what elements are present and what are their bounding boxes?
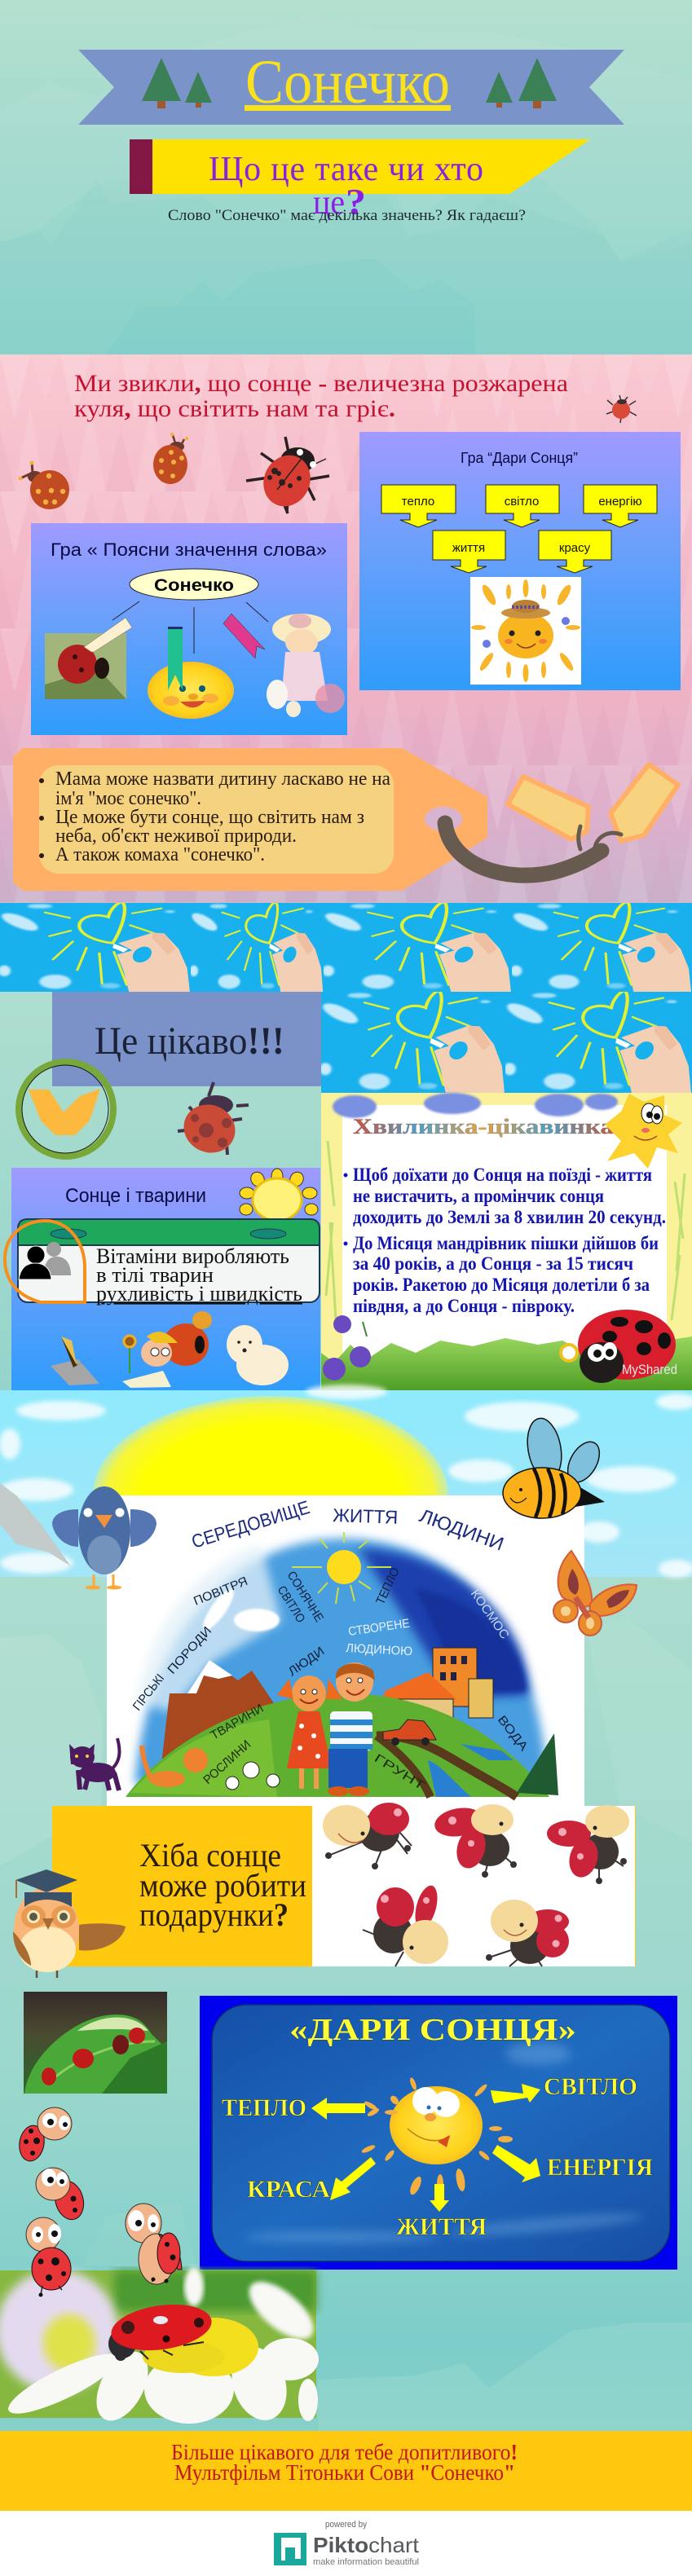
- icon: tiny ladybug: [606, 395, 637, 423]
- diagram labels: ГІРСЬКІ: [130, 1671, 167, 1713]
- panel: gifts of the sun diagram: [200, 1996, 677, 2270]
- icon: ladybug: [176, 1082, 249, 1161]
- tag text list: ім'я "моє сонечко".: [55, 788, 201, 809]
- icon: orange ladybug left: [18, 461, 75, 515]
- fact title: Хвилинка-цікавинка: [353, 1115, 614, 1138]
- ladybug 5: [486, 1900, 569, 1966]
- top ladybug: [16, 2107, 72, 2163]
- sun drawing: [292, 1532, 391, 1604]
- heading block: interesting: Це цікаво!!!: [95, 1019, 284, 1063]
- diagram labels: СТВОРЕНЕ: [347, 1617, 411, 1639]
- question text: [139, 1837, 306, 1933]
- photo: ladybug on leaf: [45, 633, 126, 699]
- icon: orange ladybug middle: [153, 433, 188, 484]
- ladybug 1: [323, 1803, 412, 1869]
- window text: рухливість і швидкість: [96, 1282, 302, 1306]
- background: lower mint section: [0, 1577, 692, 2431]
- icon: purple flowers: [323, 1315, 371, 1380]
- green labels: ТВАРИНИ: [209, 1702, 266, 1742]
- heading: sun statement: куля, що світить нам та гріє .: [74, 395, 395, 422]
- tag inner box: [39, 765, 394, 874]
- arrow labels: ЖИТТЯ: [396, 2213, 487, 2240]
- grass: [321, 1336, 692, 1390]
- diagram labels: ВОДА: [495, 1713, 531, 1754]
- tag text list: Це може бути сонце, що світить нам з: [55, 807, 364, 828]
- window text: в тілі тварин: [96, 1263, 214, 1287]
- subtitle text: ?: [346, 182, 366, 222]
- images: sky with heart sun row 1: [0, 902, 692, 992]
- ladybug on flower: [108, 2299, 214, 2361]
- sun face: [148, 662, 234, 719]
- diagram labels: КОСМОС: [468, 1587, 512, 1642]
- ladybug 4: [363, 1883, 448, 1966]
- diagram labels: ПОВІТРЯ: [192, 1574, 249, 1609]
- icon: sun: [240, 1169, 318, 1221]
- box labels: енергію: [598, 495, 642, 509]
- buildings: [383, 1648, 493, 1724]
- watermark: MyShared: [622, 1362, 677, 1377]
- icon: bee: [503, 1416, 606, 1518]
- ribbon: green: [168, 627, 183, 690]
- panel: fun facts minute: [321, 1093, 692, 1390]
- panel: sky with big sun: [0, 1385, 692, 1595]
- icon: polar bear: [227, 1325, 289, 1385]
- fact text: доходить до Землі за 8 хвилин 20 секунд.: [353, 1207, 666, 1227]
- icon: butterfly in ring: [19, 1062, 113, 1156]
- box labels: красу: [559, 541, 591, 555]
- icon: bird: [52, 1486, 156, 1589]
- logo words: Piktochart: [313, 2533, 420, 2557]
- road and water: [377, 1736, 517, 1797]
- panel: game gifts of the sun: [359, 432, 681, 690]
- intro question text: Слово "Сонечко" має декілька значень? Як гадаєш?: [168, 207, 526, 224]
- girl: [277, 1676, 342, 1789]
- clouds: [0, 1385, 692, 1578]
- diagram title: «ДАРИ СОНЦЯ»: [289, 2013, 576, 2047]
- question text: подарунки?: [139, 1896, 289, 1933]
- fact text: Щоб доїхати до Сонця на поїзді - життя: [353, 1165, 652, 1185]
- window text: [96, 1244, 302, 1306]
- footer text: Більше цікавого для тебе допитливого!: [171, 2440, 518, 2464]
- cat and flowers: [142, 1746, 280, 1790]
- icon: cartoon ladybug: [122, 1311, 212, 1388]
- box labels: [402, 495, 642, 555]
- diagram labels: ЛЮДИ: [286, 1645, 327, 1679]
- mountains: [161, 1660, 281, 1797]
- ribbon: white: [84, 618, 132, 652]
- icon: trees right: [486, 58, 557, 108]
- green hill: [126, 1693, 549, 1797]
- green labels: РОСЛИНИ: [201, 1737, 253, 1787]
- ladybug 3: [547, 1805, 629, 1884]
- diagram labels: ПОРОДИ: [165, 1624, 214, 1677]
- diagram labels: СОНЯЧНЕ: [284, 1569, 326, 1624]
- background: top mint section: [0, 0, 692, 355]
- title text: Сонечко: [245, 48, 450, 117]
- photo: ladybug on daisy: [0, 2267, 323, 2429]
- box labels: тепло: [402, 495, 434, 509]
- arrow boxes: [381, 485, 657, 573]
- title lettering: ЛЮДИНИ: [417, 1504, 507, 1555]
- window text: Вітаміни виробляють: [96, 1244, 289, 1268]
- arrow labels: ТЕПЛО: [222, 2094, 306, 2121]
- images: sky with heart sun row 2: [319, 990, 692, 1093]
- logo tagline: make information beautiful: [313, 2557, 419, 2567]
- dome sky: [134, 1539, 548, 1785]
- title lettering: ЖИТТЯ: [333, 1504, 399, 1528]
- arrow labels: КРАСА: [247, 2176, 330, 2203]
- blue blots: [333, 1093, 618, 1118]
- small tags: [508, 764, 678, 841]
- boy: [328, 1662, 375, 1796]
- picture: sun with hat: [470, 577, 581, 685]
- oval: word: [130, 569, 258, 600]
- fact text: До Місяця мандрівник пішки дійшов би: [353, 1233, 659, 1253]
- title banner: [78, 48, 624, 125]
- footer: Piktochart credit: [0, 2511, 692, 2576]
- icon: ladybug right: [126, 2204, 182, 2284]
- title lettering: СЕРЕДОВИЩЕ: [189, 1496, 312, 1552]
- heading: sun statement: [74, 370, 568, 422]
- fact text: за 40 років, а до Сонця - за 15 тисяч: [353, 1253, 633, 1274]
- title lettering: [189, 1496, 507, 1555]
- oval: word: Сонечко: [154, 576, 234, 595]
- photo: ladybugs on leaf: [24, 1992, 167, 2094]
- green labels: ГРУНТ: [372, 1751, 427, 1793]
- panel: sun and animals: [5, 1168, 320, 1390]
- icon: owl: [13, 1869, 126, 1978]
- picture: human environment: [107, 1495, 584, 1806]
- diagram labels: ЛЮДИНОЮ: [346, 1641, 413, 1658]
- background: middle mint section: [0, 992, 321, 1390]
- window box: [18, 1219, 320, 1302]
- fact text: півдня, а до Сонця - півроку.: [353, 1296, 575, 1316]
- icon: orange butterfly: [553, 1551, 637, 1636]
- sun with face: [361, 2076, 513, 2196]
- footer text: Мультфільм Тітоньки Сови "Сонечко": [174, 2460, 515, 2485]
- ladybug 2: [433, 1804, 517, 1878]
- panel: pink section background: [0, 354, 692, 903]
- panel: orange tag: [13, 748, 678, 891]
- question text: Хіба сонце: [139, 1837, 281, 1874]
- heading: sun statement: Ми звикли , що сонце - величезна розжарена: [74, 370, 568, 397]
- diagram labels: ТЕПЛО: [373, 1565, 403, 1607]
- tag text list: неба, об'єкт неживої природи.: [55, 826, 297, 847]
- subtitle text: [209, 151, 483, 222]
- panel: game explain the word: [31, 523, 347, 735]
- tag hole: [425, 807, 462, 831]
- car: [383, 1720, 436, 1746]
- box labels: життя: [452, 541, 485, 555]
- question text: може робити: [139, 1867, 306, 1904]
- fact text: [344, 1165, 666, 1316]
- panel: question gifts: [52, 1803, 636, 1966]
- icon: butterfly on flower: [51, 1336, 106, 1385]
- icon: sun with face: [605, 1094, 682, 1169]
- green labels: [201, 1702, 427, 1793]
- tag text list: Мама може назвати дитину ласкаво не на: [55, 768, 390, 790]
- arrow labels: ЕНЕРГІЯ: [547, 2154, 653, 2181]
- tree: [517, 1733, 558, 1795]
- diagram labels: СВІТЛО: [275, 1583, 308, 1626]
- bottom ladybug: [26, 2217, 71, 2296]
- logo mark: [274, 2533, 306, 2565]
- arrows: [311, 2084, 540, 2212]
- tag text list: [39, 768, 390, 865]
- tag text list: А також комаха "сонечко".: [55, 844, 265, 865]
- powered by: powered by: [325, 2520, 367, 2530]
- icon: feather: [0, 1483, 71, 1566]
- icon: people in orange frame: [5, 1221, 85, 1302]
- diagram labels: [130, 1565, 531, 1754]
- sun half: [93, 1396, 448, 1495]
- ribbon: pink: [223, 614, 265, 658]
- fact text: років. Ракетою до Місяця долетіли б за: [353, 1275, 650, 1295]
- subtitle text: це: [313, 184, 345, 222]
- subtitle ribbon: [130, 139, 590, 222]
- footer text: [171, 2440, 518, 2485]
- middle ladybug: [36, 2168, 88, 2223]
- panel title: Гра « Поясни значення слова»: [51, 539, 327, 560]
- fact text: не вистачить, а промінчик сонця: [353, 1186, 604, 1206]
- panel title: Гра “Дари Сонця”: [461, 450, 578, 466]
- subtitle text: Що це таке чи хто: [209, 151, 483, 188]
- panel title: Сонце і тварини: [65, 1185, 206, 1207]
- doll picture: [267, 614, 345, 717]
- icon: big ladybug: [246, 437, 329, 514]
- icon: purple cat: [69, 1738, 119, 1790]
- icon: trees left: [142, 58, 212, 108]
- arrow labels: [222, 2073, 653, 2240]
- footer banner: [0, 2431, 692, 2511]
- box labels: світло: [505, 495, 539, 509]
- heading block: interesting: [52, 992, 321, 1086]
- arrows from oval: [112, 601, 268, 654]
- icon: stacked ladybugs: [16, 2107, 88, 2296]
- arrow labels: СВІТЛО: [544, 2073, 637, 2100]
- streaks: [245, 2042, 644, 2243]
- icon: big ladybug with eyes: [561, 1310, 676, 1383]
- tag string: [445, 823, 602, 875]
- white image of ladybugs: [312, 1806, 635, 1966]
